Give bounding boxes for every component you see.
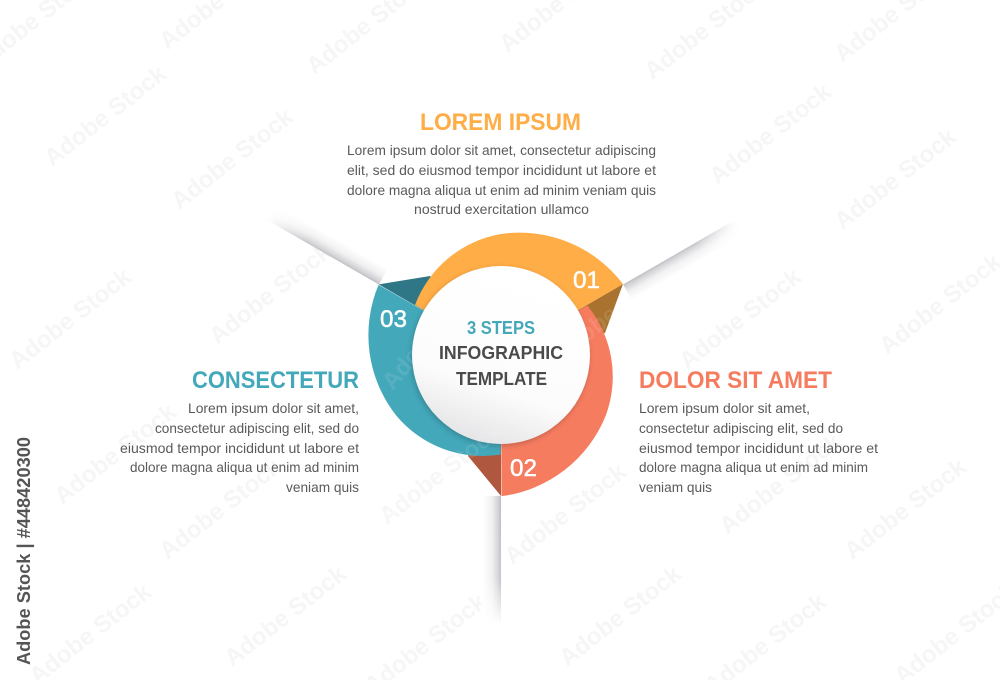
watermark pattern: Adobe Stock	[839, 453, 972, 565]
center label: TEMPLATE	[456, 369, 547, 389]
watermark over ring: Adobe	[548, 300, 623, 368]
center label	[439, 318, 563, 389]
text block: step 3: eiusmod tempor incididunt ut labore et	[120, 440, 359, 456]
watermark pattern: Adobe Stock	[219, 560, 352, 672]
watermark pattern: Adobe Stock	[4, 263, 137, 375]
watermark pattern: Adobe Stock	[499, 458, 632, 570]
watermark pattern: Adobe Stock	[204, 238, 337, 350]
shadow ray: bottom	[481, 496, 502, 624]
stock id caption: Adobe Stock | #448420300	[14, 437, 34, 665]
number 02: 02	[510, 455, 537, 482]
heading: consectetur: CONSECTETUR	[192, 367, 359, 394]
number 03: 03	[380, 306, 407, 333]
watermark pattern: Adobe Stock	[49, 398, 182, 510]
text block: step 1: nostrud exercitation ullamco	[414, 201, 589, 217]
center label: 3 STEPS	[467, 318, 535, 338]
watermark over ring: Adobe Stock	[374, 418, 507, 530]
heading: lorem ipsum: LOREM IPSUM	[420, 109, 581, 136]
text block: step 1	[347, 142, 656, 217]
text block: step 2: eiusmod tempor incididunt ut labore et	[639, 440, 878, 456]
text block: step 1: elit, sed do eiusmod tempor incididunt ut labore et	[347, 162, 656, 178]
watermark pattern: Adobe Stock	[704, 78, 837, 190]
watermark pattern: Adobe Stock	[829, 123, 962, 235]
watermark pattern: Adobe Stock	[674, 263, 807, 375]
shadow ray: upper left	[268, 203, 389, 285]
ring segment 01: orange	[415, 233, 623, 355]
watermark over ring	[374, 265, 623, 530]
text block: step 1: Lorem ipsum dolor sit amet, consectetur adipiscing	[347, 142, 656, 158]
ring segment 03: teal	[334, 249, 544, 491]
text block: step 2: Lorem ipsum dolor sit amet,	[639, 400, 810, 416]
shadow ray: upper right	[623, 220, 744, 302]
fold: teal step	[379, 276, 501, 355]
text block: step 2: dolore magna aliqua ut enim ad minim	[639, 459, 868, 475]
center disc	[411, 266, 590, 446]
watermark pattern: Adobe Stock	[154, 453, 287, 565]
text block: step 2	[639, 400, 878, 495]
text block: step 1: dolore magna aliqua ut enim ad minim veniam quis	[347, 182, 656, 198]
text block: step 3: Lorem ipsum dolor sit amet,	[188, 400, 359, 416]
watermark pattern: Adobe Stock	[714, 428, 847, 540]
number 01: 01	[573, 267, 600, 294]
watermark pattern: Adobe Stock	[374, 418, 507, 530]
text block: step 3: veniam quis	[286, 479, 359, 495]
watermark pattern: Adobe Stock	[554, 560, 687, 672]
heading: dolor sit amet: DOLOR SIT AMET	[639, 367, 832, 394]
fold: coral step	[468, 355, 501, 496]
text block: step 3: consectetur adipiscing elit, sed do	[155, 420, 359, 436]
watermark over ring: Adobe Stock	[377, 265, 492, 395]
text block: step 2: consectetur adipiscing elit, sed do	[639, 420, 843, 436]
center label: INFOGRAPHIC	[439, 343, 563, 363]
watermark pattern: Adobe Stock	[166, 103, 299, 215]
watermark pattern: Adobe Stock	[39, 60, 172, 172]
text block: step 3: dolore magna aliqua ut enim ad minim	[130, 459, 359, 475]
ring segment 02: coral	[440, 281, 650, 522]
text block: step 3	[120, 400, 359, 495]
text block: step 2: veniam quis	[639, 479, 712, 495]
fold: orange step	[501, 284, 623, 355]
